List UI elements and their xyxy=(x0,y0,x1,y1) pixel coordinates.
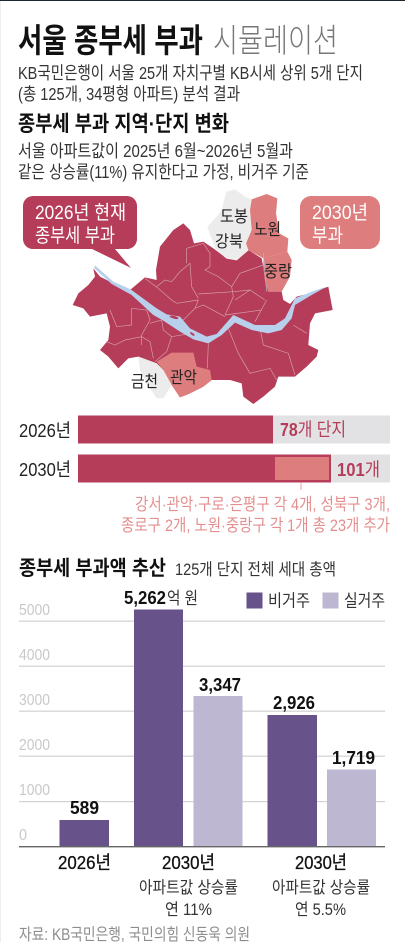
intro text: (총 125개, 34평형 아파트) 분석 결과 xyxy=(18,84,240,104)
legend: 실거주 xyxy=(344,592,385,610)
x-axis labels: 2030년 xyxy=(295,852,347,873)
district: Geumcheon xyxy=(138,357,172,398)
callout: 2026 taxed: 2026년 현재 xyxy=(35,202,126,224)
legend: 비거주 xyxy=(268,592,310,610)
section description: 서울 아파트값이 2025년 6월~2026년 5월과 xyxy=(18,141,293,161)
title: 서울 종부세 부과 xyxy=(18,22,203,59)
x-axis labels: 2030년 xyxy=(162,852,215,873)
map labels: 금천 xyxy=(131,372,158,391)
bar chart: 5000 xyxy=(19,602,50,619)
section heading: region change: 종부세 부과 지역·단지 변화 xyxy=(18,112,229,136)
x-axis labels: 연 11% xyxy=(165,900,212,919)
bar chart: 1,719 xyxy=(332,747,375,768)
bar chart: 5,262 xyxy=(124,587,166,608)
title: 시뮬레이션 xyxy=(213,22,338,59)
bar: 2026 complexes xyxy=(19,416,390,444)
note: added complexes xyxy=(121,495,390,535)
callout: 2030 taxed xyxy=(300,196,380,249)
intro text xyxy=(18,63,363,104)
x-axis labels: 아파트값 상승률 xyxy=(272,878,370,897)
callout: 2026 taxed xyxy=(23,196,137,268)
bar: 2030 complexes xyxy=(19,454,390,490)
bar chart: 억 원 xyxy=(167,589,198,608)
bar chart: 0 xyxy=(19,827,27,844)
bar: 2030 complexes: 101개 xyxy=(337,459,380,480)
section heading: tax estimate: 종부세 부과액 추산 xyxy=(19,557,166,580)
map labels: 강북 xyxy=(215,232,243,251)
bar: 2026 complexes: 78개 단지 xyxy=(280,419,346,440)
district: Jungnang xyxy=(263,252,292,292)
bar chart: 1000 xyxy=(19,782,50,799)
callout: 2030 taxed: 부과 xyxy=(312,225,343,247)
section heading: tax estimate: 125개 단지 전체 세대 총액 xyxy=(175,560,336,579)
x-axis labels: 2026년 xyxy=(58,852,111,873)
section description: 같은 상승률(11%) 유지한다고 가정, 비거주 기준 xyxy=(18,162,309,182)
section heading: tax estimate xyxy=(19,557,336,580)
bar chart: 4000 xyxy=(19,647,50,664)
section description xyxy=(18,141,309,182)
bar chart: 2,926 xyxy=(273,692,315,713)
bar chart: 3,347 xyxy=(199,674,241,695)
map labels xyxy=(131,208,292,391)
bar chart: 3000 xyxy=(19,692,50,709)
Han River xyxy=(94,265,327,343)
district group: taxed in 2026 xyxy=(73,223,333,404)
district: Dobong and Gangbuk xyxy=(207,189,252,260)
map labels: 노원 xyxy=(254,220,281,239)
map labels: 중랑 xyxy=(264,262,292,281)
callout: 2026 taxed: 종부세 부과 xyxy=(35,225,115,247)
map of Seoul xyxy=(73,189,333,404)
bar chart xyxy=(19,587,385,847)
callout: 2030 taxed: 2030년 xyxy=(312,202,368,224)
district: Nowon xyxy=(246,194,288,258)
x-axis labels: 아파트값 상승률 xyxy=(139,878,238,897)
bar: 2026 complexes: 2026년 xyxy=(19,420,71,441)
district: Gwanak xyxy=(157,353,212,397)
bar: 2030 complexes: 2030년 xyxy=(19,459,71,480)
bar chart: 589 xyxy=(70,797,99,818)
legend xyxy=(246,592,385,610)
map labels: 관악 xyxy=(170,368,197,387)
x-axis labels xyxy=(58,852,370,919)
map labels: 도봉 xyxy=(220,208,248,226)
river islands xyxy=(169,315,195,336)
x-axis labels: 연 5.5% xyxy=(295,900,346,919)
bar chart: 2000 xyxy=(19,737,50,754)
